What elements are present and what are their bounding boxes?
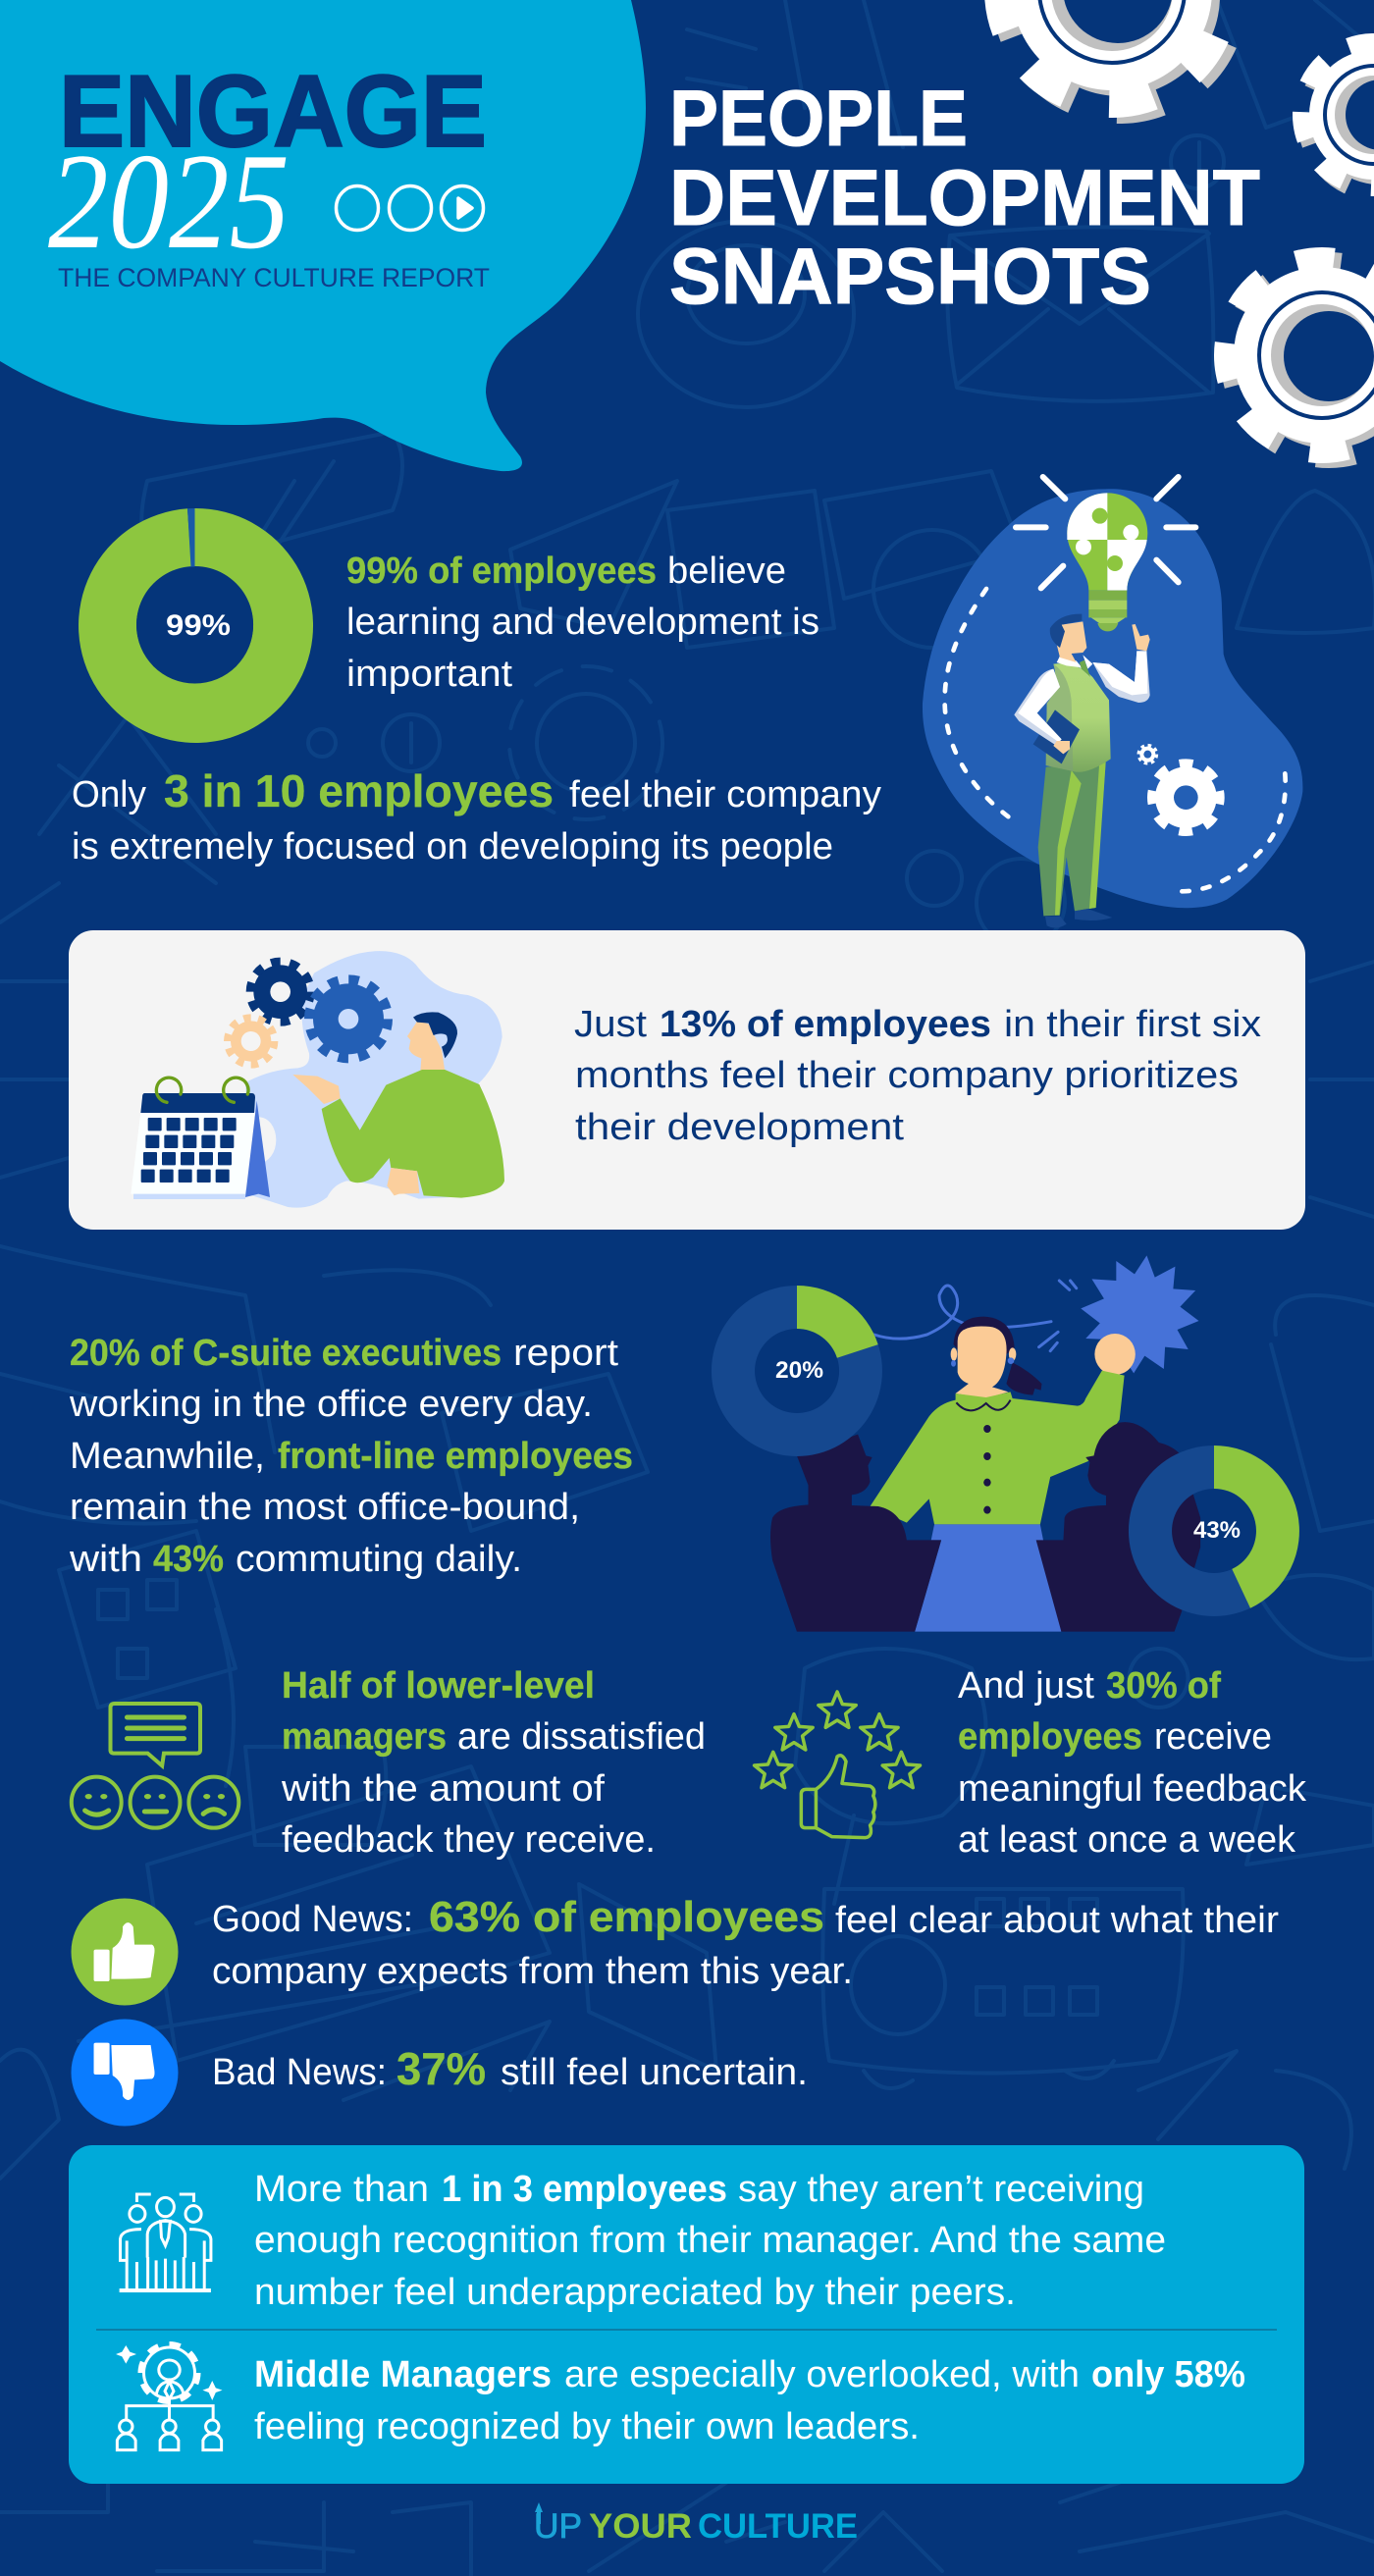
illustration: presenter with silhouettes	[770, 1255, 1200, 1632]
text: C-suite executives: remain the most office-bound,	[70, 1487, 580, 1528]
man figure	[1014, 614, 1150, 927]
text: middle managers: feeling recognized by their own leaders.	[254, 2406, 920, 2447]
text: good news: Good News:	[212, 1899, 413, 1940]
text: 30% of employees: meaningful feedback	[958, 1768, 1307, 1810]
icon: lower gear	[1206, 239, 1374, 476]
text: 30% of employees: 30% of	[1106, 1665, 1221, 1707]
text: C-suite executives: report	[513, 1333, 618, 1374]
presenter	[871, 1317, 1136, 1632]
text: C-suite executives: 43%	[153, 1539, 224, 1580]
text: 3 in 10 employees: Only	[72, 774, 146, 815]
icon: thumbs up badge	[71, 1898, 179, 2006]
speech bubble header	[0, 0, 646, 471]
text: lower-level managers: managers	[282, 1716, 447, 1758]
calendar	[131, 1078, 270, 1199]
text: 30% of employees: And just	[958, 1665, 1094, 1707]
logo word ENGAGE: ENGAGE	[59, 55, 487, 169]
donut chart: 43%	[1129, 1446, 1299, 1616]
text: 3 in 10 employees	[72, 765, 881, 867]
text: 3 in 10 employees: is extremely focused on developing its people	[72, 826, 833, 867]
text: middle managers: only 58%	[1091, 2354, 1245, 2395]
text: 1 in 3 employees: say they aren’t receiving	[738, 2169, 1144, 2210]
text: 99% of employees: important	[346, 654, 512, 695]
text: lower-level managers: Half of lower-level	[282, 1665, 595, 1707]
text: C-suite executives: commuting daily.	[236, 1539, 522, 1580]
text: bad news	[212, 2043, 808, 2094]
icon: middle gear	[1284, 25, 1374, 210]
text: good news: feel clear about what their	[835, 1900, 1279, 1941]
text: 13% of employees: their development	[575, 1107, 904, 1148]
illustration: calendar, gears and person	[131, 951, 504, 1208]
title: DEVELOPMENT	[669, 154, 1260, 242]
text: 13% of employees	[574, 1004, 1261, 1148]
person in green sweater	[292, 1012, 504, 1198]
text: 99% of employees	[346, 551, 819, 695]
three gears	[228, 962, 388, 1065]
blue blob backdrop	[923, 489, 1302, 908]
text: 30% of employees	[958, 1665, 1307, 1861]
logo: Up Your Culture: UP	[534, 2507, 582, 2546]
text: 1 in 3 employees: More than	[254, 2169, 429, 2210]
text: middle managers: are especially overlooked, with	[564, 2354, 1080, 2395]
icon: employee group	[120, 2194, 211, 2290]
text: 13% of employees: in their first six	[1004, 1004, 1261, 1045]
text: 3 in 10 employees: feel their company	[569, 774, 881, 815]
dashed motion arcs	[945, 589, 1286, 891]
text: 3 in 10 employees: 3 in 10 employees	[164, 765, 554, 816]
starburst	[1081, 1255, 1198, 1373]
title: PEOPLE	[669, 75, 968, 163]
icon: stars and thumbs up outline	[755, 1692, 921, 1838]
text: C-suite executives: working in the office every day.	[69, 1384, 593, 1425]
donut chart: 99%: 99%	[166, 609, 231, 642]
donut chart: 20%: 20%	[775, 1357, 823, 1384]
text: 99% of employees: learning and development is	[346, 602, 819, 643]
donut chart: 20%	[712, 1286, 882, 1456]
icon: manager gear and team	[116, 2343, 223, 2450]
title: SNAPSHOTS	[669, 233, 1151, 321]
text: bad news: still feel uncertain.	[501, 2052, 808, 2093]
icon: thumbs down badge	[71, 2020, 179, 2126]
text: C-suite executives: front-line employees	[278, 1436, 633, 1477]
scribble and accent lines	[874, 1281, 1077, 1351]
logo year 2025: 2025	[48, 126, 290, 278]
lightbulb rays	[1016, 477, 1195, 588]
text: 13% of employees: 13% of employees	[660, 1004, 991, 1045]
icon: feedback bubble and faces	[72, 1704, 238, 1828]
text: 99% of employees: believe	[667, 551, 786, 592]
text: C-suite executives: 20% of C-suite executives	[70, 1333, 502, 1374]
panel: first six months card	[69, 930, 1305, 1230]
text: 30% of employees: at least once a week	[958, 1819, 1296, 1861]
text: 13% of employees: Just	[574, 1004, 647, 1045]
text: C-suite executives: Meanwhile,	[70, 1436, 265, 1477]
text: 30% of employees: receive	[1154, 1716, 1272, 1758]
donut chart: 99%	[79, 508, 313, 743]
text: 13% of employees: months feel their company prioritizes	[575, 1055, 1239, 1096]
panel: recognition	[69, 2145, 1304, 2484]
text: lower-level managers: feedback they receive.	[282, 1819, 656, 1861]
three rings with play icon	[336, 186, 483, 230]
text: bad news: Bad News:	[212, 2052, 387, 2093]
logo subtitle: THE COMPANY CULTURE REPORT	[58, 263, 490, 292]
logo: Up Your Culture: YOUR	[589, 2507, 692, 2546]
white gears	[1138, 745, 1226, 837]
text: middle managers	[254, 2354, 1245, 2447]
donut chart: 43%: 43%	[1193, 1517, 1241, 1544]
text: C-suite executives: with	[69, 1539, 142, 1580]
illustration: man and puzzle lightbulb	[923, 477, 1302, 927]
text: lower-level managers	[281, 1665, 706, 1861]
text: good news: 63% of employees	[429, 1893, 824, 1941]
text: good news: company expects from them this year.	[212, 1951, 853, 1992]
text: lower-level managers: with the amount of	[281, 1768, 605, 1810]
text: 1 in 3 employees	[254, 2169, 1166, 2313]
text: bad news: 37%	[396, 2043, 486, 2094]
logo: Up Your Culture: CULTURE	[698, 2507, 858, 2546]
text: 1 in 3 employees: enough recognition from their manager. And the same	[254, 2220, 1166, 2261]
text: C-suite executives	[69, 1333, 633, 1580]
text: lower-level managers: are dissatisfied	[457, 1716, 706, 1758]
logo: Engage 2025	[48, 55, 490, 292]
title	[669, 75, 1260, 321]
text: 30% of employees: employees	[958, 1716, 1142, 1758]
text: 1 in 3 employees: 1 in 3 employees	[442, 2169, 727, 2210]
icon: top gear	[970, 0, 1262, 138]
text: 1 in 3 employees: number feel underappreciated by their peers.	[254, 2272, 1016, 2313]
light blob backdrop	[245, 951, 502, 1208]
logo: Up Your Culture	[534, 2502, 858, 2546]
text: 99% of employees: 99% of employees	[346, 551, 657, 592]
audience silhouettes	[770, 1422, 1200, 1632]
puzzle lightbulb	[1067, 493, 1147, 631]
text: good news	[212, 1893, 1279, 1992]
text: middle managers: Middle Managers	[254, 2354, 552, 2395]
